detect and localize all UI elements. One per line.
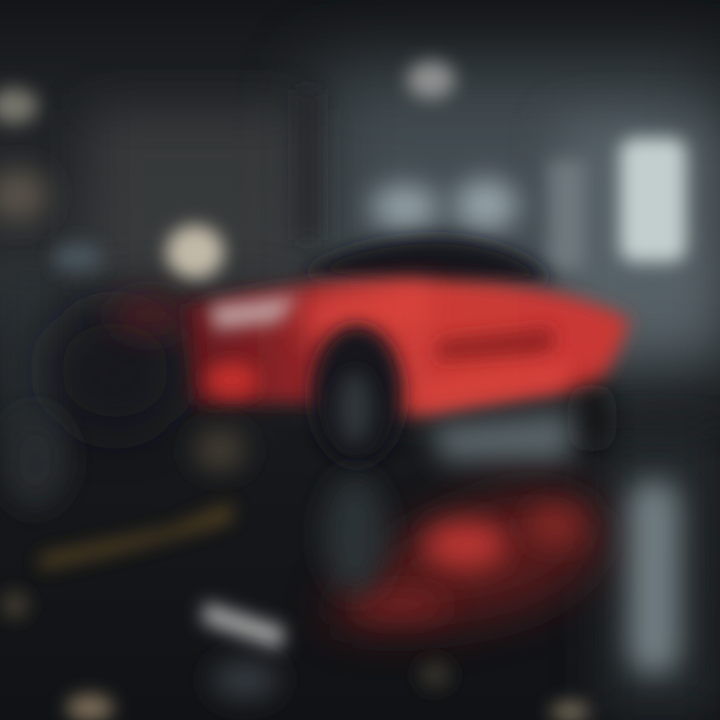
floor: wet reflections: [1, 412, 680, 720]
car hood highlight: [210, 295, 300, 330]
amber floor streak: [40, 502, 232, 570]
car front wheel: [311, 325, 403, 465]
lights: ceiling and wall glow: [0, 61, 686, 279]
car side crease: [435, 328, 555, 360]
car lower bright panel: [425, 360, 570, 410]
car: red sports car: [45, 238, 630, 465]
car underside reflection: [430, 412, 572, 462]
car front lamp glow: [206, 362, 258, 398]
reflection of the window: [628, 480, 680, 675]
reflection of a pale light: [202, 602, 285, 650]
car dark front: [45, 305, 185, 435]
reflection of the car: [330, 493, 605, 629]
small floor glows: [66, 694, 114, 720]
car roof and windows: [300, 238, 555, 290]
car hood bright panel: [300, 285, 430, 340]
car maroon nose: [110, 293, 190, 337]
car rear wheel: [576, 384, 608, 452]
car body: [185, 280, 630, 416]
